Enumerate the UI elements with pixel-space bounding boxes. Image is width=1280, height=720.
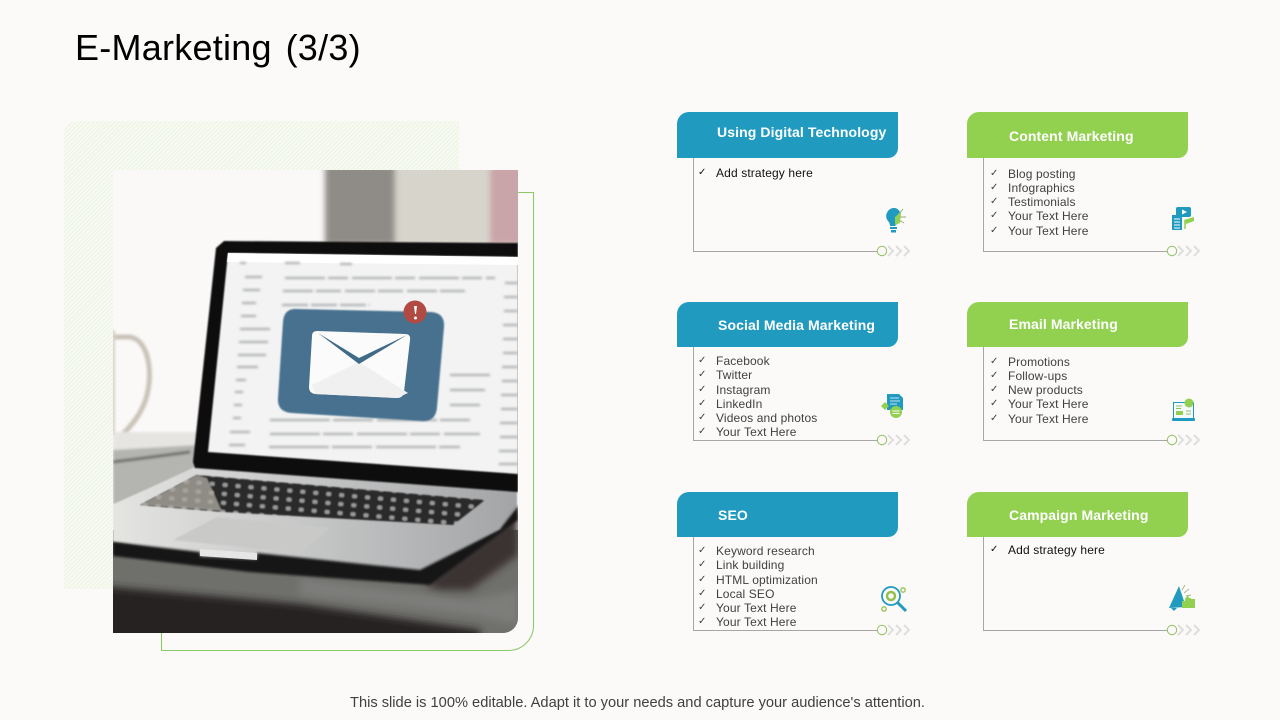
icon: email on laptop bbox=[1172, 398, 1195, 421]
list bbox=[700, 544, 818, 629]
list: Blog posting bbox=[1008, 166, 1076, 180]
connector line with circle and chevrons bbox=[693, 347, 910, 446]
list: Facebook bbox=[716, 354, 770, 368]
header: Campaign Marketing bbox=[1009, 507, 1148, 523]
list: Videos and photos bbox=[716, 411, 817, 425]
list: Your Text Here bbox=[1008, 397, 1089, 411]
card: Email Marketing bbox=[967, 302, 1200, 446]
list: Instagram bbox=[716, 383, 771, 397]
connector line with circle and chevrons bbox=[983, 158, 1200, 256]
header: Using Digital Technology bbox=[717, 124, 886, 140]
list: New products bbox=[1008, 383, 1083, 397]
list: Add strategy here bbox=[716, 166, 813, 180]
card: Using Digital Technology bbox=[677, 112, 910, 256]
screen bbox=[208, 253, 518, 474]
list: Follow-ups bbox=[1008, 369, 1067, 383]
list: Twitter bbox=[716, 368, 752, 382]
icon: magnifier with gears bbox=[881, 586, 907, 612]
list: Your Text Here bbox=[716, 601, 797, 615]
footer note: This slide is 100% editable. Adapt it to your needs and capture your audience's attention. bbox=[350, 695, 925, 711]
card: Campaign Marketing bbox=[967, 492, 1200, 636]
list: HTML optimization bbox=[716, 573, 818, 587]
header bbox=[677, 302, 898, 347]
green outline frame behind photo bbox=[160, 192, 534, 651]
list: Your Text Here bbox=[716, 615, 797, 629]
list: LinkedIn bbox=[716, 397, 762, 411]
card: SEO bbox=[677, 492, 910, 636]
list bbox=[992, 166, 1089, 238]
mug and left table bbox=[113, 329, 196, 505]
list: Testimonials bbox=[1008, 195, 1076, 209]
table bbox=[113, 530, 518, 633]
header bbox=[967, 302, 1188, 347]
header: Content Marketing bbox=[1009, 128, 1134, 144]
icon: light bulb bbox=[886, 208, 906, 232]
list bbox=[700, 354, 817, 439]
title: E-Marketing (3/3) bbox=[75, 27, 361, 68]
list: Your Text Here bbox=[1008, 412, 1089, 426]
connector line with circle and chevrons bbox=[693, 537, 910, 636]
icon: megaphone and thumbs up bbox=[1169, 584, 1195, 611]
header bbox=[967, 492, 1188, 537]
keyboard bbox=[140, 475, 485, 525]
connector line with circle and chevrons bbox=[983, 347, 1200, 446]
trackpad bbox=[174, 518, 238, 546]
list: Your Text Here bbox=[1008, 224, 1089, 238]
list: Keyword research bbox=[716, 544, 815, 558]
list bbox=[992, 354, 1089, 426]
blurred inbox rows bbox=[229, 263, 518, 464]
photo: laptop with email notification bbox=[113, 170, 518, 633]
laptop base bbox=[113, 466, 517, 572]
header: SEO bbox=[718, 507, 748, 523]
header bbox=[677, 112, 898, 158]
email notification tile bbox=[278, 300, 444, 421]
list: Infographics bbox=[1008, 181, 1075, 195]
hatched green backdrop panel bbox=[64, 121, 459, 589]
connector line with circle and chevrons bbox=[983, 537, 1200, 636]
list: Promotions bbox=[1008, 354, 1070, 368]
bezel bbox=[193, 241, 518, 492]
connector line with circle and chevrons bbox=[693, 158, 910, 256]
header: Social Media Marketing bbox=[718, 317, 875, 333]
header: Email Marketing bbox=[1009, 316, 1118, 332]
icon: video and document bbox=[1172, 207, 1194, 230]
icon: social chat bbox=[881, 394, 903, 418]
card: Content Marketing bbox=[967, 112, 1200, 256]
list: Local SEO bbox=[716, 587, 775, 601]
list: Your Text Here bbox=[716, 425, 797, 439]
header bbox=[677, 492, 898, 537]
header bbox=[967, 112, 1188, 158]
list: Your Text Here bbox=[1008, 209, 1089, 223]
list: Add strategy here bbox=[1008, 543, 1105, 557]
list: Link building bbox=[716, 558, 784, 572]
card: Social Media Marketing bbox=[677, 302, 910, 446]
